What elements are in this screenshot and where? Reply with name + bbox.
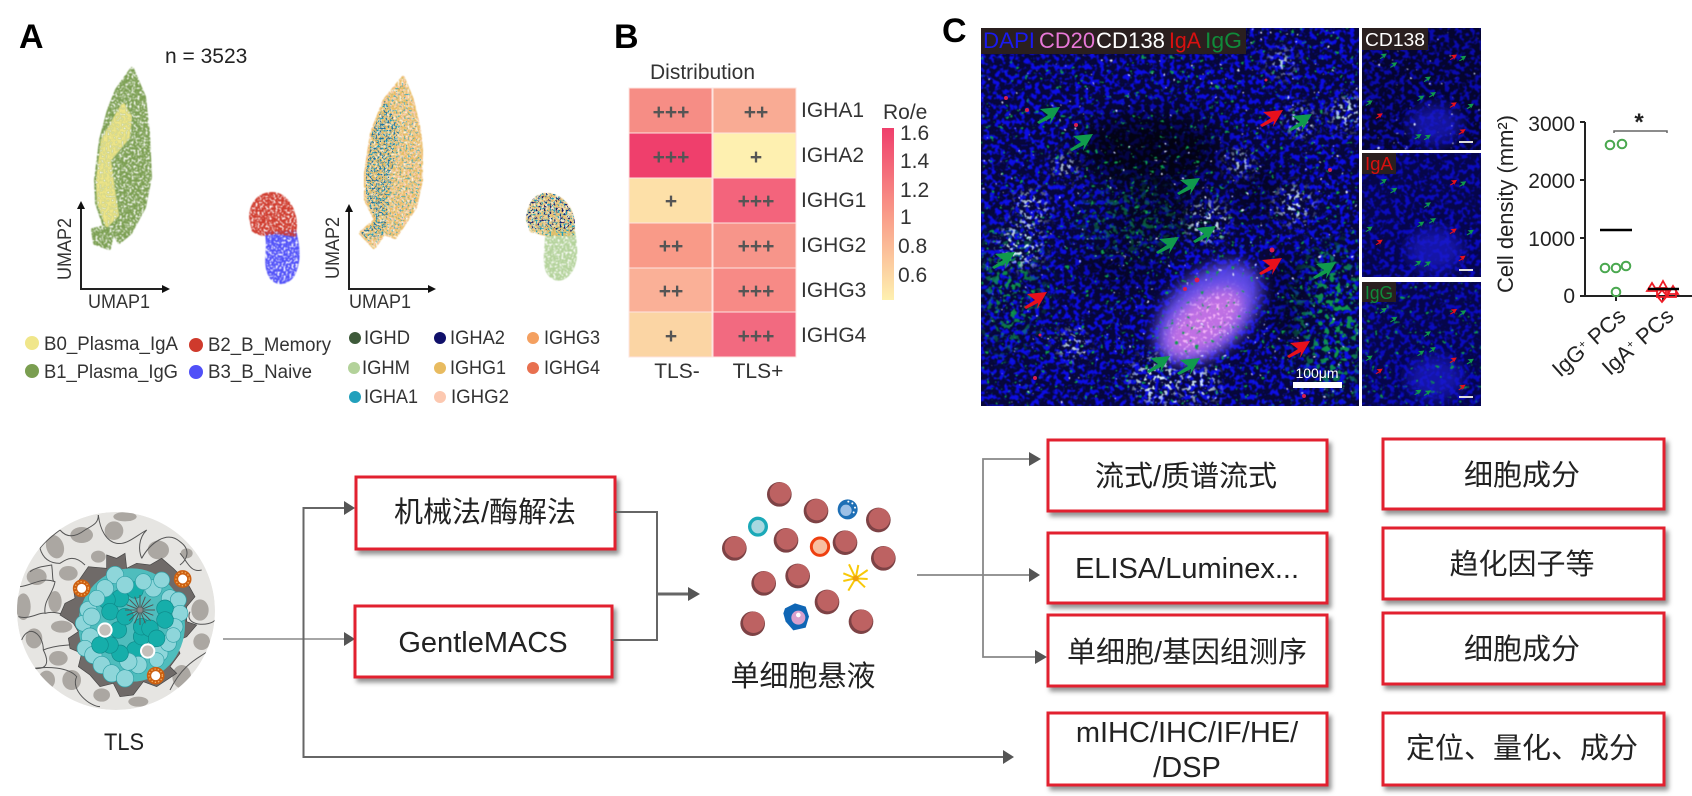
heatmap row labels: IGHA1 — [801, 99, 864, 122]
orange ring cells — [75, 572, 189, 682]
x tick labels: + — [1576, 338, 1589, 351]
grey stromal cells inside core — [98, 623, 154, 658]
cell count label: n = 3523 — [165, 45, 247, 68]
sub-panel: IgG: IgG — [1365, 283, 1393, 303]
IgA points — [1647, 281, 1678, 302]
legend: isotypes: IGHG2 — [451, 387, 509, 408]
channel labels: IgG — [1205, 28, 1242, 53]
significance bar — [1614, 109, 1667, 136]
yellow dendritic cell — [843, 564, 868, 591]
arrow: branch to mechanical box and imaging box — [304, 501, 1014, 764]
arrow: TLS to GentleMACS — [223, 632, 355, 646]
box: GentleMACS — [355, 606, 612, 677]
axes right: UMAP1 — [349, 292, 411, 313]
TLS label: TLS — [104, 729, 144, 756]
orange cell — [811, 538, 829, 555]
heatmap marks: +++ — [738, 235, 774, 258]
box: cytokines: 趋化因子等 — [1449, 548, 1595, 581]
channel labels: CD138 — [1096, 28, 1165, 53]
dark reticular ring — [60, 553, 197, 697]
B cell cluster — [249, 192, 300, 284]
box: mechanical or enzymatic: 机械法/酶解法 — [394, 496, 576, 529]
sub-panel: CD138 — [1362, 28, 1481, 150]
cell density chart — [1493, 109, 1692, 382]
legend: clusters: B0_Plasma_IgA — [44, 334, 178, 355]
heatmap row labels: IGHG1 — [801, 189, 866, 212]
heatmap marks: + — [750, 146, 762, 169]
heatmap row labels: IGHG3 — [801, 279, 866, 302]
main microscopy image — [981, 28, 1359, 406]
box: cell composition 2: 细胞成分 — [1464, 633, 1580, 666]
channel labels: IgA — [1169, 28, 1201, 53]
legend: clusters: B1_Plasma_IgG — [44, 362, 178, 383]
y tick labels: 1000 — [1528, 228, 1575, 251]
isotype B cell cluster — [526, 193, 577, 281]
heatmap marks: +++ — [738, 190, 774, 213]
box: flow cytometry: 流式/质谱流式 — [1095, 460, 1277, 493]
arrows main — [992, 107, 1336, 375]
legend: isotypes: IGHD — [364, 328, 410, 349]
panel letter B: B — [614, 18, 639, 56]
channel labels — [981, 28, 1246, 54]
legend: isotypes: IGHA1 — [364, 387, 418, 408]
mean line IgG — [1600, 229, 1632, 231]
panel letter A: A — [19, 18, 44, 56]
sub-panel: IgA — [1362, 153, 1481, 277]
heatmap marks: + — [665, 190, 677, 213]
mean line IgA — [1648, 288, 1679, 290]
y tick labels — [1528, 113, 1575, 308]
heatmap title: Distribution — [650, 61, 755, 84]
heatmap column labels: TLS- — [654, 360, 700, 383]
legend: clusters: B3_B_Naive — [208, 362, 312, 383]
scale bar — [1293, 368, 1342, 388]
blue granulated cell — [838, 499, 858, 519]
box: sequencing — [1048, 615, 1327, 686]
panel C: immunofluorescence — [942, 12, 1692, 406]
legend: isotypes: IGHG1 — [450, 358, 506, 379]
colour scale: Ro/e — [883, 101, 927, 124]
sub-panel: IgG — [1362, 282, 1481, 406]
heatmap row labels: IGHG2 — [801, 234, 866, 257]
y axis title: Cell density (mm²) — [1493, 115, 1518, 293]
box: localization: 定位、量化、成分 — [1406, 732, 1638, 765]
stromal nuclei — [16, 512, 210, 707]
panel letter C: C — [942, 12, 967, 50]
suspension label: 单细胞悬液 — [730, 660, 876, 693]
colour scale: 1 — [900, 206, 912, 229]
colour scale: 1.2 — [900, 179, 929, 202]
x tick labels: PCs — [1578, 303, 1630, 354]
box: ELISA — [1048, 533, 1327, 603]
single cell suspension illustration — [722, 482, 896, 636]
chart axes — [1580, 122, 1692, 301]
axes right: UMAP2 — [323, 217, 344, 279]
colour scale: 1.4 — [900, 150, 930, 173]
legend: isotypes — [348, 328, 600, 408]
x tick labels: + — [1624, 338, 1637, 351]
channel labels: CD20 — [1039, 28, 1095, 53]
box: cell composition 2 — [1383, 613, 1664, 684]
heatmap column labels — [654, 360, 783, 383]
stromal cell outlines — [18, 515, 215, 707]
teal cell — [750, 518, 766, 535]
dendritic cell with rays — [125, 595, 155, 625]
panel B: heatmap — [614, 18, 930, 383]
box: cell composition 1 — [1383, 439, 1664, 509]
heatmap row labels: IGHG4 — [801, 324, 867, 347]
legend: clusters: B2_B_Memory — [208, 335, 331, 356]
box: localization — [1383, 713, 1664, 785]
blue macrophage — [783, 603, 809, 630]
heatmap marks: +++ — [738, 280, 774, 303]
IgG points — [1601, 140, 1630, 296]
legend: isotypes: IGHG3 — [544, 328, 600, 349]
sub-panel: IgA: IgA — [1365, 154, 1393, 174]
box: ELISA: ELISA/Luminex... — [1075, 553, 1299, 585]
box: cell composition 1: 细胞成分 — [1464, 459, 1580, 492]
box: cytokines — [1383, 528, 1664, 599]
UMAP: clusters — [93, 69, 300, 284]
heatmap marks: +++ — [653, 101, 689, 124]
axes right — [323, 204, 436, 313]
legend: isotypes: IGHM — [362, 358, 410, 379]
legend: clusters — [25, 334, 331, 383]
heatmap marks: ++ — [744, 101, 768, 124]
heatmap marks: + — [665, 325, 677, 348]
arrows: suspension to assays — [917, 452, 1047, 664]
x tick labels: PCs — [1626, 303, 1678, 354]
arrow: boxes to suspension — [612, 512, 700, 640]
sub-panel: CD138: CD138 — [1365, 30, 1425, 50]
colour scale: 1.6 — [900, 122, 929, 145]
scale bar: 100μm — [1295, 365, 1339, 381]
heatmap marks — [653, 101, 774, 348]
x tick labels: IgA — [1597, 339, 1638, 380]
colour scale: 0.8 — [898, 235, 927, 258]
x tick labels: IgG — [1547, 339, 1590, 382]
legend: isotypes: IGHA2 — [450, 328, 505, 349]
box: flow cytometry — [1048, 440, 1327, 511]
box: imaging — [1048, 713, 1327, 785]
axes left — [55, 201, 170, 313]
y tick labels: 2000 — [1528, 170, 1575, 193]
heatmap marks: +++ — [738, 325, 774, 348]
teal lymphocyte core — [75, 566, 188, 687]
heatmap cells — [629, 88, 796, 357]
box: mechanical or enzymatic — [356, 477, 615, 549]
UMAP: isotypes — [361, 78, 577, 281]
plasma cell cluster — [93, 69, 150, 248]
colour scale — [882, 101, 930, 300]
box: GentleMACS: GentleMACS — [398, 627, 568, 659]
isotype plasma cluster — [361, 78, 421, 247]
y tick labels: 3000 — [1528, 113, 1575, 136]
heatmap row labels — [801, 99, 867, 347]
box: imaging: /DSP — [1153, 752, 1221, 784]
heatmap marks: ++ — [659, 235, 683, 258]
heatmap column labels: TLS+ — [733, 360, 783, 383]
red specks — [1004, 78, 1332, 398]
axes left: UMAP1 — [88, 292, 150, 313]
channel labels: DAPI — [983, 28, 1035, 53]
panel A: UMAP plots — [19, 18, 600, 408]
box: sequencing: 单细胞/基因组测序 — [1067, 636, 1307, 669]
red cells — [722, 482, 896, 636]
heatmap marks: ++ — [659, 280, 683, 303]
x tick labels — [1547, 303, 1678, 382]
colour scale: 0.6 — [898, 264, 927, 287]
heatmap marks: +++ — [653, 146, 689, 169]
significance bar: * — [1634, 109, 1644, 136]
legend: isotypes: IGHG4 — [544, 358, 600, 379]
y tick labels: 0 — [1563, 285, 1575, 308]
box: imaging: mIHC/IHC/IF/HE/ — [1076, 717, 1299, 749]
axes left: UMAP2 — [55, 218, 76, 280]
heatmap row labels: IGHA2 — [801, 144, 864, 167]
TLS illustration — [16, 512, 215, 710]
